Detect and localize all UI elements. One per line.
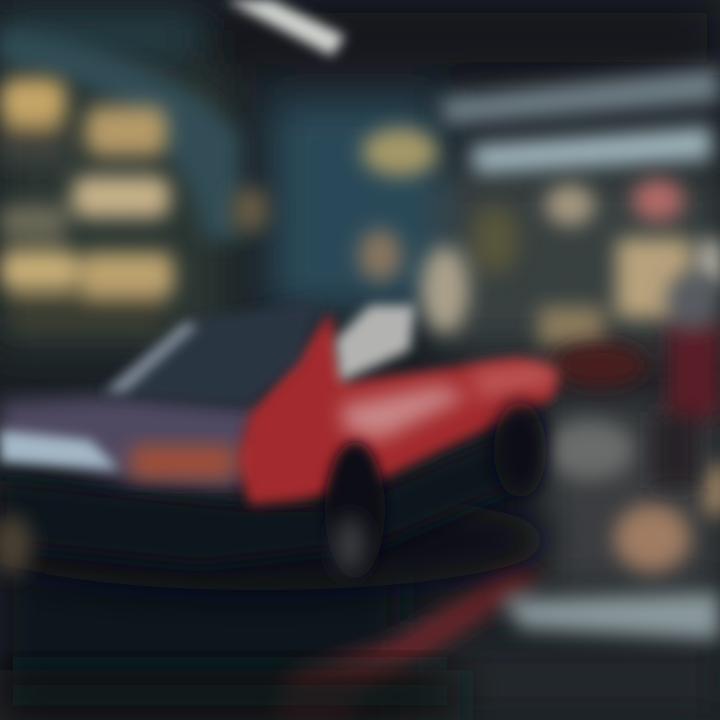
car lower body (2, 440, 498, 558)
vignette bottom (0, 670, 460, 720)
right shelf items (358, 128, 720, 346)
ceiling and wall tones (0, 0, 720, 350)
side window (335, 305, 415, 382)
left shelves (0, 78, 268, 332)
figure at right (552, 272, 720, 488)
highlight on door (340, 385, 470, 440)
windshield (126, 306, 320, 412)
car hood (0, 395, 260, 490)
orange headlight (130, 445, 235, 479)
car (0, 300, 558, 590)
floor reflections (275, 420, 720, 712)
car shadow (0, 490, 550, 590)
rear wheel (494, 402, 546, 498)
front wheel (325, 442, 385, 578)
car red body (235, 312, 558, 505)
left arch (0, 30, 240, 240)
floor tones (0, 400, 720, 720)
right window lights (440, 68, 720, 174)
windshield streak (105, 322, 198, 392)
front left glow (0, 515, 32, 575)
bonnet highlight (0, 430, 120, 470)
ceiling light (225, 0, 345, 56)
